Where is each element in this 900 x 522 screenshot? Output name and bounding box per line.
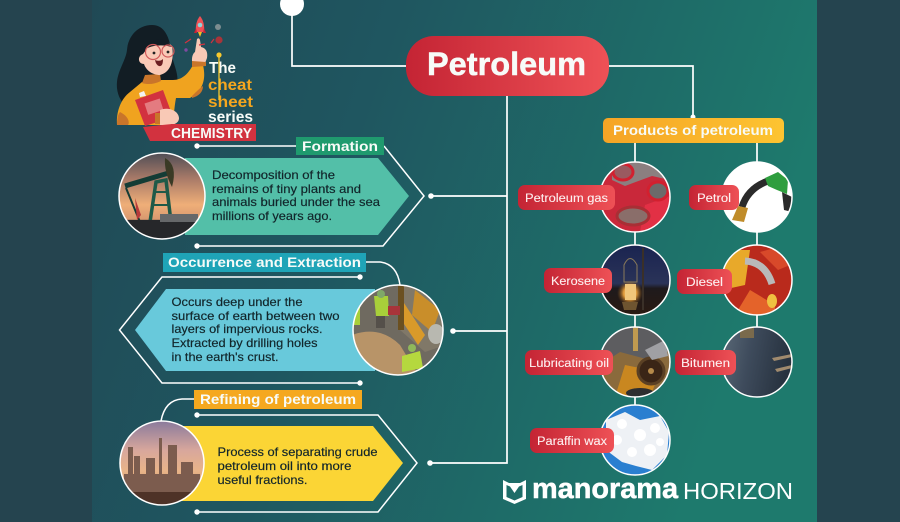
- label: Lubricating oil: Lubricating oil: [529, 356, 609, 370]
- arrow: occurrence text background: [135, 289, 375, 371]
- label: Petroleum gas: Petroleum gas: [525, 191, 608, 205]
- label: Petrol: Petrol: [697, 191, 731, 205]
- logo: manorama HORIZON: [503, 473, 793, 505]
- text: formation description: Decomposition of the: [212, 169, 335, 182]
- photo: oiled gears: [600, 327, 670, 398]
- mascot: girl pointing up with a book: [117, 16, 223, 141]
- photo: fuel nozzle: [722, 162, 792, 232]
- text: The cheat sheet series: sheet: [208, 94, 254, 111]
- panel: refining of petroleum: [120, 390, 417, 515]
- photo: kerosene lantern: [600, 245, 670, 315]
- text: occurrence description: Occurs deep under the: [172, 296, 302, 309]
- label: CHEMISTRY: CHEMISTRY: [171, 126, 252, 142]
- text: formation description: millions of years ago.: [212, 210, 332, 223]
- text: The cheat sheet series: The: [209, 60, 236, 77]
- text: refining description: petroleum oil into more: [218, 460, 352, 473]
- arrow: refining text background: [180, 426, 403, 501]
- panel: formation: [118, 137, 424, 249]
- label: Paraffin wax: [530, 428, 614, 453]
- photo: bitumen road: [722, 327, 792, 397]
- text: occurrence description: in the earth's crust.: [172, 351, 278, 364]
- text: occurrence description: layers of impervious rocks.: [172, 323, 322, 336]
- text: formation description: animals buried under the sea: [212, 196, 381, 209]
- label: Kerosene: Kerosene: [551, 274, 605, 288]
- heading: Formation: Formation: [302, 138, 378, 154]
- label: Bitumen: [675, 350, 736, 375]
- label: Lubricating oil: [525, 350, 613, 375]
- text: The cheat sheet series: series: [208, 109, 253, 126]
- logo: manorama HORIZON: HORIZON: [683, 478, 793, 504]
- label: Diesel: [677, 269, 732, 294]
- photo: drilling site with workers: [352, 284, 445, 378]
- heading: Occurrence and Extraction: Occurrence and Extraction: [168, 254, 361, 270]
- text: occurrence description: Extracted by drilling holes: [172, 337, 318, 350]
- heading: Formation: [296, 137, 384, 155]
- label: Diesel: Diesel: [686, 275, 723, 289]
- photo: gas cylinders: [600, 162, 670, 232]
- heading: Products of petroleum: [603, 118, 784, 143]
- icon: open book M: [503, 480, 526, 504]
- logo: manorama HORIZON: manorama: [532, 473, 679, 505]
- icon: rocket and planets: [184, 16, 223, 52]
- arrow: formation text background: [185, 158, 409, 235]
- heading: Refining of petroleum: Refining of petroleum: [200, 391, 356, 407]
- label: Petrol: [689, 185, 739, 210]
- text: The cheat sheet series: cheat: [208, 77, 253, 94]
- label: Petroleum gas: [518, 185, 615, 210]
- text: refining description: useful fractions.: [218, 474, 308, 487]
- photo: refinery at sunset: [120, 421, 204, 505]
- photo: oil pump jack: [118, 152, 206, 240]
- text: formation description: remains of tiny plants and: [212, 183, 361, 196]
- text: The cheat sheet series: [208, 52, 254, 126]
- photo: diesel nozzle and rising chart: [722, 245, 792, 318]
- title: Petroleum: [406, 36, 609, 96]
- panel: occurrence and extraction: [120, 253, 445, 386]
- photo: paraffin wax flakes: [600, 405, 670, 475]
- label: Bitumen: Bitumen: [681, 356, 730, 370]
- text: occurrence description: surface of earth between two: [172, 310, 340, 323]
- heading: Products of petroleum: Products of petroleum: [613, 122, 773, 138]
- connector lines from the central node: [280, 0, 696, 466]
- label: Paraffin wax: Paraffin wax: [537, 434, 607, 448]
- label: Kerosene: [544, 268, 612, 293]
- title: Petroleum: Petroleum: [427, 46, 586, 82]
- text: refining description: Process of separating crude: [218, 446, 378, 459]
- panel: products of petroleum: [518, 118, 792, 475]
